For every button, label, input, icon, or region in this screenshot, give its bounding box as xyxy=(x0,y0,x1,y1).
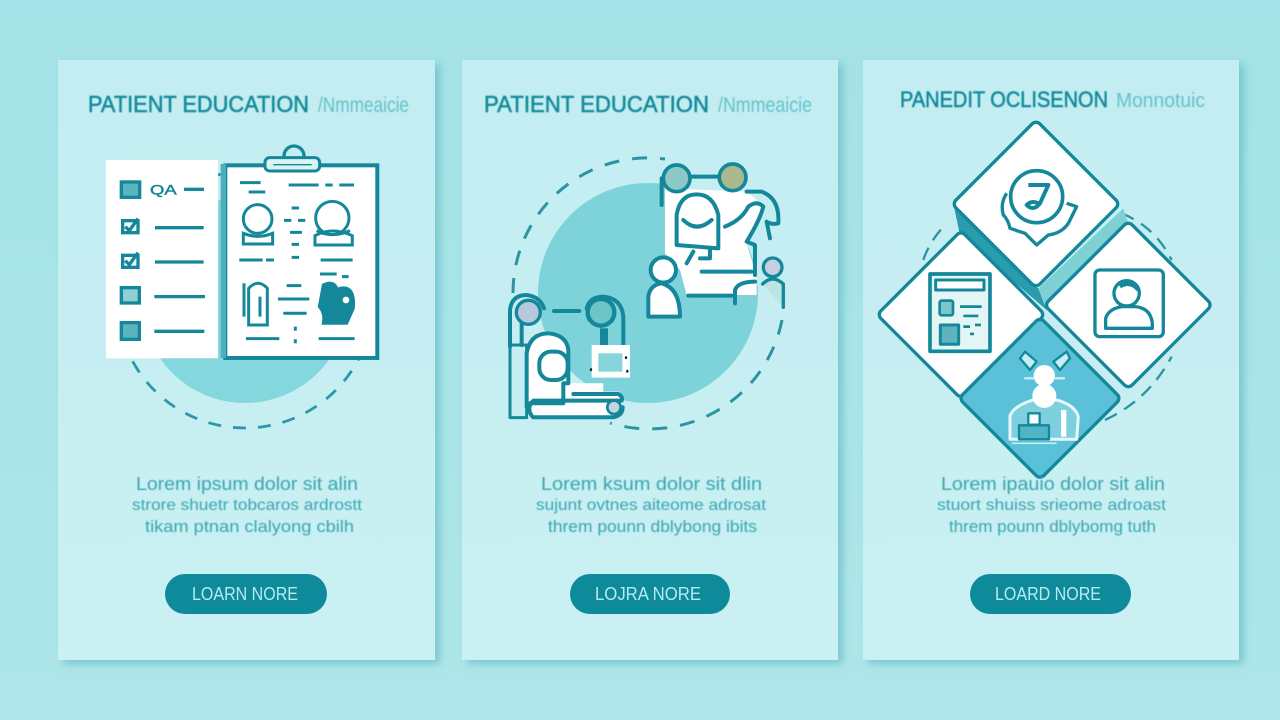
lower station xyxy=(510,295,630,418)
person right xyxy=(763,258,783,307)
body text: sujunt ovtnes aiteome adrosat xyxy=(536,497,767,514)
checklist sheet: QA xyxy=(150,182,178,198)
button xyxy=(970,574,1131,614)
body text: Lorem ipsum dolor sit alin xyxy=(136,474,358,494)
clipboard contents xyxy=(239,183,355,343)
dashed ring xyxy=(923,213,1172,420)
body text: strore shuetr tobcaros ardrostt xyxy=(132,497,363,514)
dashed ring xyxy=(117,172,373,428)
heading: /Nmmeaicie xyxy=(318,94,409,117)
body text: tikam ptnan clalyong cbilh xyxy=(145,517,354,536)
button xyxy=(570,574,730,614)
panel: clipboard card xyxy=(58,60,435,660)
backdrop circle xyxy=(142,197,348,403)
heading: PATIENT EDUCATION xyxy=(484,91,709,117)
clipboard xyxy=(223,146,377,358)
button: LOJRA NORE xyxy=(595,584,701,604)
illustration: circle with robotic stations xyxy=(510,158,783,429)
panel: diamond card xyxy=(863,60,1239,660)
diamond: top head xyxy=(952,120,1120,288)
body text: stuort shuiss srieome adroast xyxy=(937,497,1167,514)
body text: Lorem ksum dolor sit dlin xyxy=(541,474,762,494)
checklist sheet xyxy=(106,160,218,358)
upper station xyxy=(662,164,778,303)
button: LOARD NORE xyxy=(995,584,1101,604)
heading: Monnotuic xyxy=(1116,90,1205,112)
diamond: bottom presenter xyxy=(959,317,1121,479)
body text: Lorem ipauio dolor sit alin xyxy=(941,474,1165,494)
card background xyxy=(58,60,435,660)
card background xyxy=(462,60,838,660)
body text xyxy=(536,474,767,536)
diamond: left document xyxy=(877,231,1045,399)
heading: PANEDIT OCLISENON xyxy=(900,87,1108,112)
body text xyxy=(132,474,363,536)
body text: threm pounn dblybong ibits xyxy=(548,517,757,536)
heading: PATIENT EDUCATION xyxy=(88,91,309,117)
body text xyxy=(937,474,1167,536)
illustration: four diamonds xyxy=(877,120,1212,479)
person left xyxy=(648,257,680,317)
backdrop circle xyxy=(538,183,758,403)
button xyxy=(165,574,327,614)
dashed ring xyxy=(513,158,665,293)
card background xyxy=(863,60,1239,660)
diamond: right portrait xyxy=(1044,221,1212,389)
body text: threm pounn dblybomg tuth xyxy=(949,517,1156,536)
illustration: checklist and clipboard xyxy=(106,146,377,428)
heading: /Nmmeaicie xyxy=(718,94,812,117)
button: LOARN NORE xyxy=(192,584,298,604)
teal bands behind diamonds xyxy=(954,208,1047,310)
panel: robotic arm card xyxy=(462,60,838,660)
